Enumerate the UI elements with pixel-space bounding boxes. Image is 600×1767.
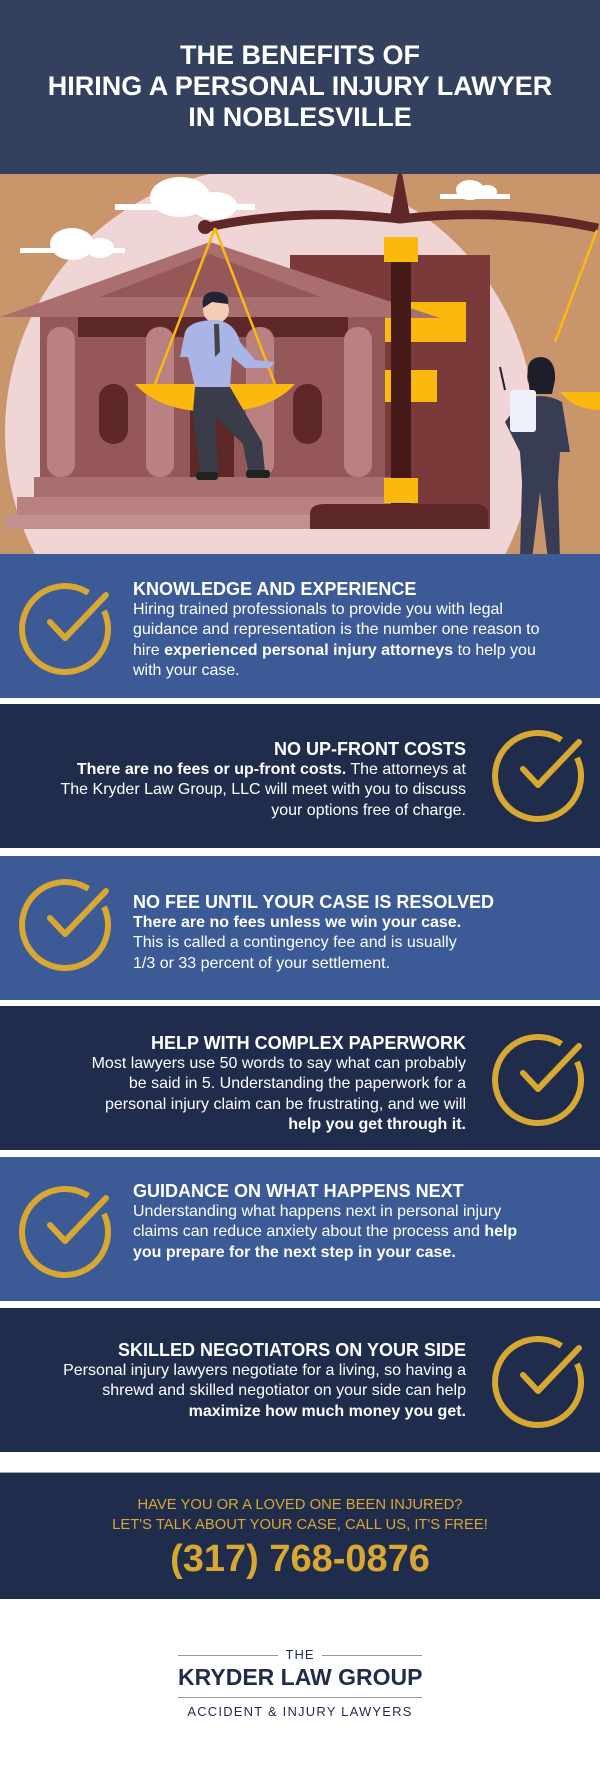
- panel: skilled negotiators: [0, 1308, 600, 1452]
- text block: [63, 1340, 466, 1420]
- icon: check circle: [492, 1034, 584, 1126]
- panel: no up-front costs: [0, 704, 600, 848]
- header: [0, 0, 600, 174]
- scale: [389, 162, 411, 222]
- text block: KNOWLEDGE AND EXPERIENCE: [133, 579, 416, 599]
- logo: KRYDER LAW GROUP: [178, 1664, 422, 1690]
- text block: help you get through it.: [288, 1116, 466, 1133]
- call to action: [0, 1472, 600, 1599]
- title: [48, 40, 552, 132]
- logo: ACCIDENT & INJURY LAWYERS: [187, 1704, 413, 1719]
- text block: [133, 892, 494, 972]
- text block: There are no fees or up-front costs. The attorneys at: [77, 761, 466, 778]
- text block: Understanding what happens next in personal injury: [133, 1203, 501, 1220]
- title: THE BENEFITS OF: [180, 40, 420, 70]
- text block: The Kryder Law Group, LLC will meet with you to discuss: [60, 781, 466, 798]
- text block: This is called a contingency fee and is usually: [133, 934, 457, 951]
- panel: no fee until resolved: [0, 856, 600, 1000]
- text block: [133, 579, 540, 679]
- panel: knowledge and experience: [0, 554, 600, 698]
- icon: check circle: [19, 1186, 112, 1278]
- text block: SKILLED NEGOTIATORS ON YOUR SIDE: [118, 1340, 466, 1360]
- logo: THE: [286, 1647, 314, 1662]
- text block: you prepare for the next step in your case.: [133, 1244, 456, 1261]
- man: [203, 297, 229, 323]
- text block: There are no fees unless we win your case.: [133, 914, 461, 931]
- panel: guidance on what happens next: [0, 1157, 600, 1301]
- icon: check circle: [19, 879, 112, 971]
- text block: NO UP-FRONT COSTS: [274, 739, 466, 759]
- text block: Hiring trained professionals to provide you with legal: [133, 601, 503, 618]
- text block: hire experienced personal injury attorneys to help you: [133, 642, 536, 659]
- text block: GUIDANCE ON WHAT HAPPENS NEXT: [133, 1181, 464, 1201]
- text block: with your case.: [133, 662, 240, 679]
- text block: HELP WITH COMPLEX PAPERWORK: [151, 1033, 466, 1053]
- logo: [178, 1647, 422, 1719]
- text block: shrewd and skilled negotiator on your side can help: [102, 1382, 466, 1399]
- icon: check circle: [492, 730, 584, 822]
- text block: [92, 1033, 466, 1133]
- text block: your options free of charge.: [271, 802, 466, 819]
- text block: [60, 739, 466, 819]
- text block: be said in 5. Understanding the paperwork for a: [129, 1075, 466, 1092]
- text block: Personal injury lawyers negotiate for a living, so having a: [63, 1362, 466, 1379]
- text block: NO FEE UNTIL YOUR CASE IS RESOLVED: [133, 892, 494, 912]
- phone number: (317) 768-0876: [170, 1538, 430, 1580]
- text block: Most lawyers use 50 words to say what can probably: [92, 1055, 466, 1072]
- text block: [133, 1181, 517, 1261]
- icon: check circle: [492, 1336, 584, 1428]
- title: HIRING A PERSONAL INJURY LAWYER: [48, 71, 552, 101]
- text block: personal injury claim can be frustrating, and we will: [105, 1096, 466, 1113]
- illustration: justice scale and courthouse: [0, 174, 600, 554]
- text block: maximize how much money you get.: [189, 1403, 466, 1420]
- panel: complex paperwork: [0, 1006, 600, 1150]
- text block: guidance and representation is the number one reason to: [133, 621, 540, 638]
- cta text: [112, 1497, 488, 1533]
- cta text: LET'S TALK ABOUT YOUR CASE, CALL US, IT'S FREE!: [112, 1517, 488, 1533]
- text block: 1/3 or 33 percent of your settlement.: [133, 955, 390, 972]
- text block: claims can reduce anxiety about the process and help: [133, 1223, 517, 1240]
- woman: [527, 364, 553, 390]
- title: IN NOBLESVILLE: [188, 102, 412, 132]
- cta text: HAVE YOU OR A LOVED ONE BEEN INJURED?: [137, 1497, 463, 1513]
- icon: check circle: [19, 583, 112, 675]
